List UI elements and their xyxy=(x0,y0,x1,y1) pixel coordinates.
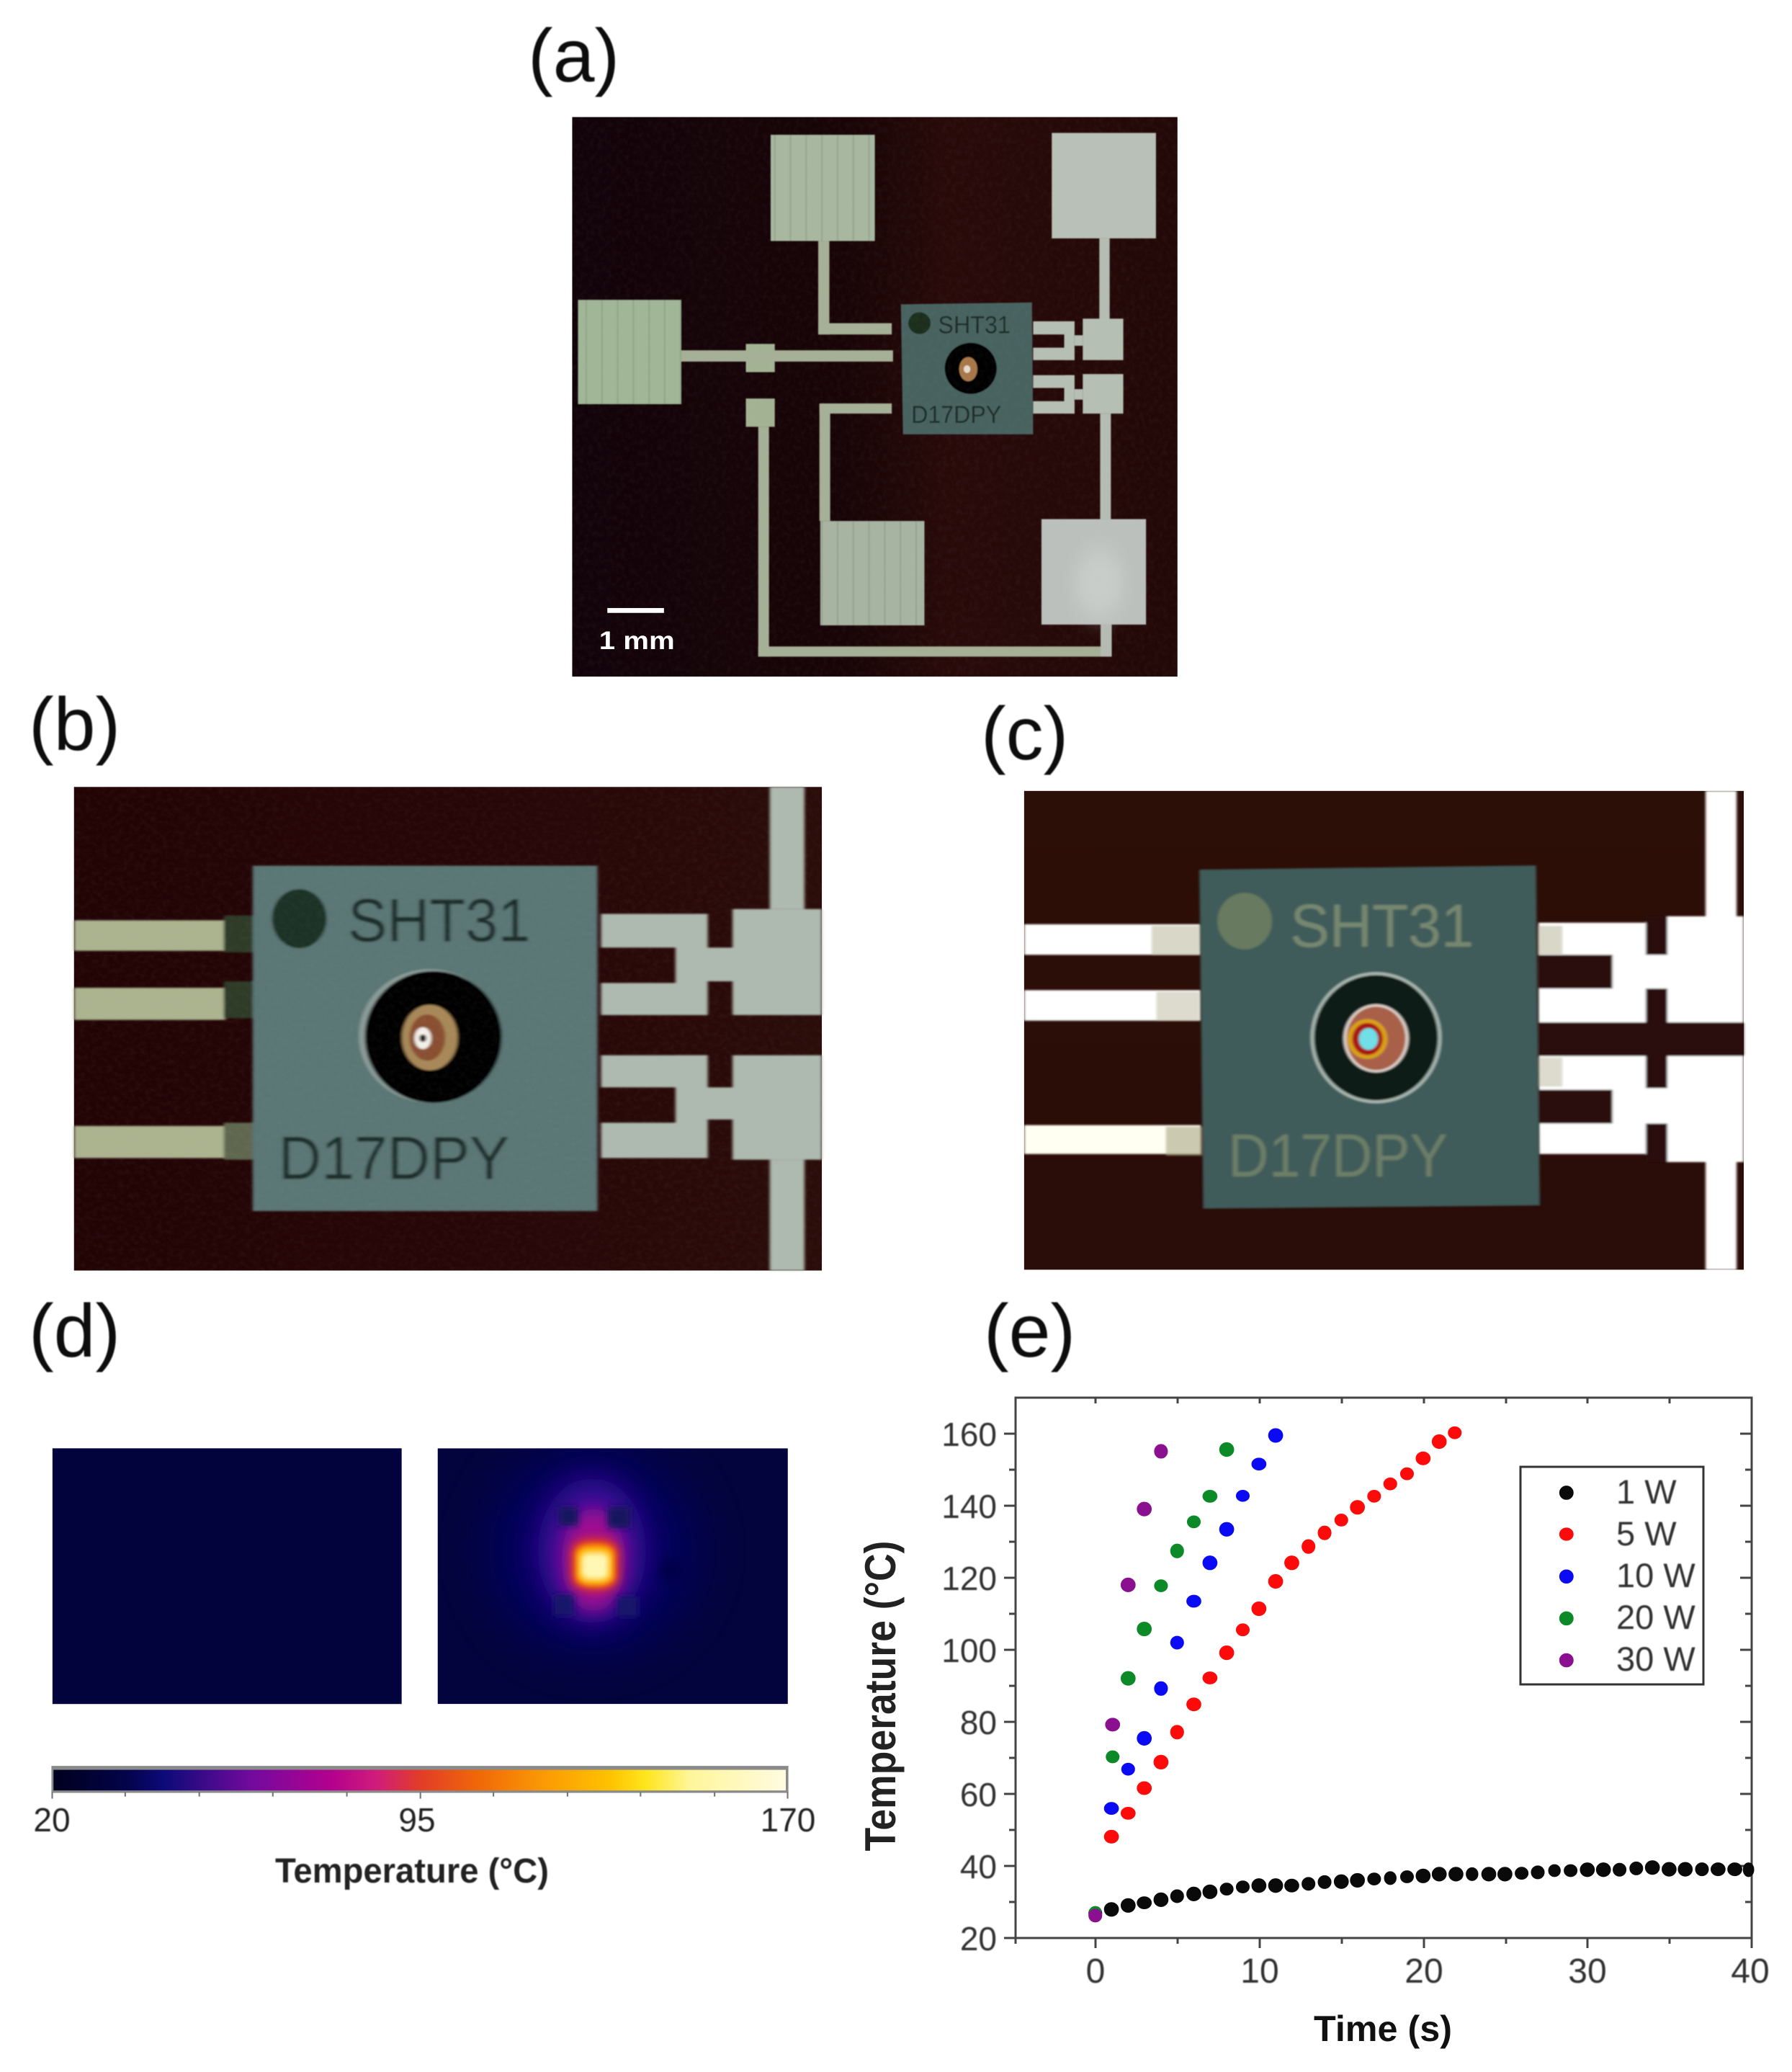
colour bar title: Temperature (°C) xyxy=(275,1852,549,1890)
scale bar: 1 mm xyxy=(599,626,675,655)
x axis tick labels: 0 xyxy=(1086,1952,1105,1991)
dark gaps xyxy=(1538,916,1744,1162)
thermal image: off state xyxy=(53,1448,402,1704)
label: (e): (e) xyxy=(984,1290,1075,1373)
data series xyxy=(1089,1427,1753,1921)
label: (a): (a) xyxy=(528,14,619,98)
legend xyxy=(1520,1467,1703,1684)
right pads and traces xyxy=(601,787,822,1271)
sensor chip: D17DPY xyxy=(279,1124,509,1192)
label: (d): (d) xyxy=(29,1290,120,1373)
scale bar xyxy=(599,608,675,655)
y axis tick labels xyxy=(941,1416,997,1957)
sensor chip xyxy=(901,303,1033,434)
legend: 1 W xyxy=(1616,1473,1677,1511)
legend: 30 W xyxy=(1616,1640,1695,1678)
label: (b): (b) xyxy=(29,683,120,767)
colour bar labels: 170 xyxy=(761,1801,815,1839)
series: 5 W xyxy=(1105,1427,1461,1843)
y axis tick labels: 80 xyxy=(960,1704,997,1741)
panel b: close-up of sensor xyxy=(74,787,822,1271)
right fork pads xyxy=(1033,318,1124,414)
x axis tick labels: 30 xyxy=(1568,1952,1607,1991)
x axis tick labels: 10 xyxy=(1240,1952,1279,1991)
y axis tick labels: 60 xyxy=(960,1776,997,1813)
y axis tick labels: 160 xyxy=(941,1416,997,1453)
series: 10 W xyxy=(1105,1429,1282,1814)
plot axes xyxy=(1004,1398,1752,1948)
left traces xyxy=(74,916,254,1160)
series: 1 W xyxy=(1089,1861,1753,1920)
y axis tick labels: 20 xyxy=(960,1920,997,1957)
x axis title: Time (s) xyxy=(1314,2009,1452,2049)
panel a: sensor board photograph xyxy=(572,117,1178,676)
series: 20 W xyxy=(1090,1443,1233,1917)
legend: 10 W xyxy=(1616,1556,1695,1594)
y axis title: Temperature (°C) xyxy=(856,1540,905,1852)
panel d: thermal images and colour scale xyxy=(33,1447,815,1890)
y axis tick labels: 120 xyxy=(941,1560,997,1597)
y axis tick labels: 100 xyxy=(941,1632,997,1669)
photo grain xyxy=(572,117,1178,676)
sensor chip: D17DPY xyxy=(911,401,1001,429)
series: 30 W xyxy=(1089,1444,1167,1921)
colour bar labels xyxy=(33,1801,815,1839)
white traces xyxy=(1024,791,1744,1269)
panel c: sensor close-up, second exposure xyxy=(1024,791,1744,1269)
legend: 20 W xyxy=(1616,1598,1695,1636)
sensor chip xyxy=(1152,865,1562,1209)
colour bar labels: 95 xyxy=(398,1801,436,1839)
colour bar labels: 20 xyxy=(33,1801,71,1839)
legend: 5 W xyxy=(1616,1514,1677,1553)
sensor chip: SHT31 xyxy=(1290,892,1474,960)
x axis tick labels: 20 xyxy=(1405,1952,1443,1991)
contact pads xyxy=(578,133,1156,625)
photo grain xyxy=(74,787,822,1271)
thermal image: heated state xyxy=(438,1447,788,1704)
label: (c): (c) xyxy=(981,692,1068,776)
conductive traces xyxy=(681,238,1112,656)
x axis tick labels xyxy=(1086,1952,1770,1991)
y axis tick labels: 40 xyxy=(960,1848,997,1885)
sensor chip xyxy=(253,866,598,1211)
sensor chip: SHT31 xyxy=(938,311,1011,339)
colour bar xyxy=(51,1766,789,1799)
sensor chip: D17DPY xyxy=(1228,1121,1448,1189)
sensor chip: SHT31 xyxy=(348,886,531,955)
panel e: temperature versus time chart xyxy=(856,1398,1770,2049)
y axis tick labels: 140 xyxy=(941,1488,997,1525)
x axis tick labels: 40 xyxy=(1731,1952,1770,1991)
